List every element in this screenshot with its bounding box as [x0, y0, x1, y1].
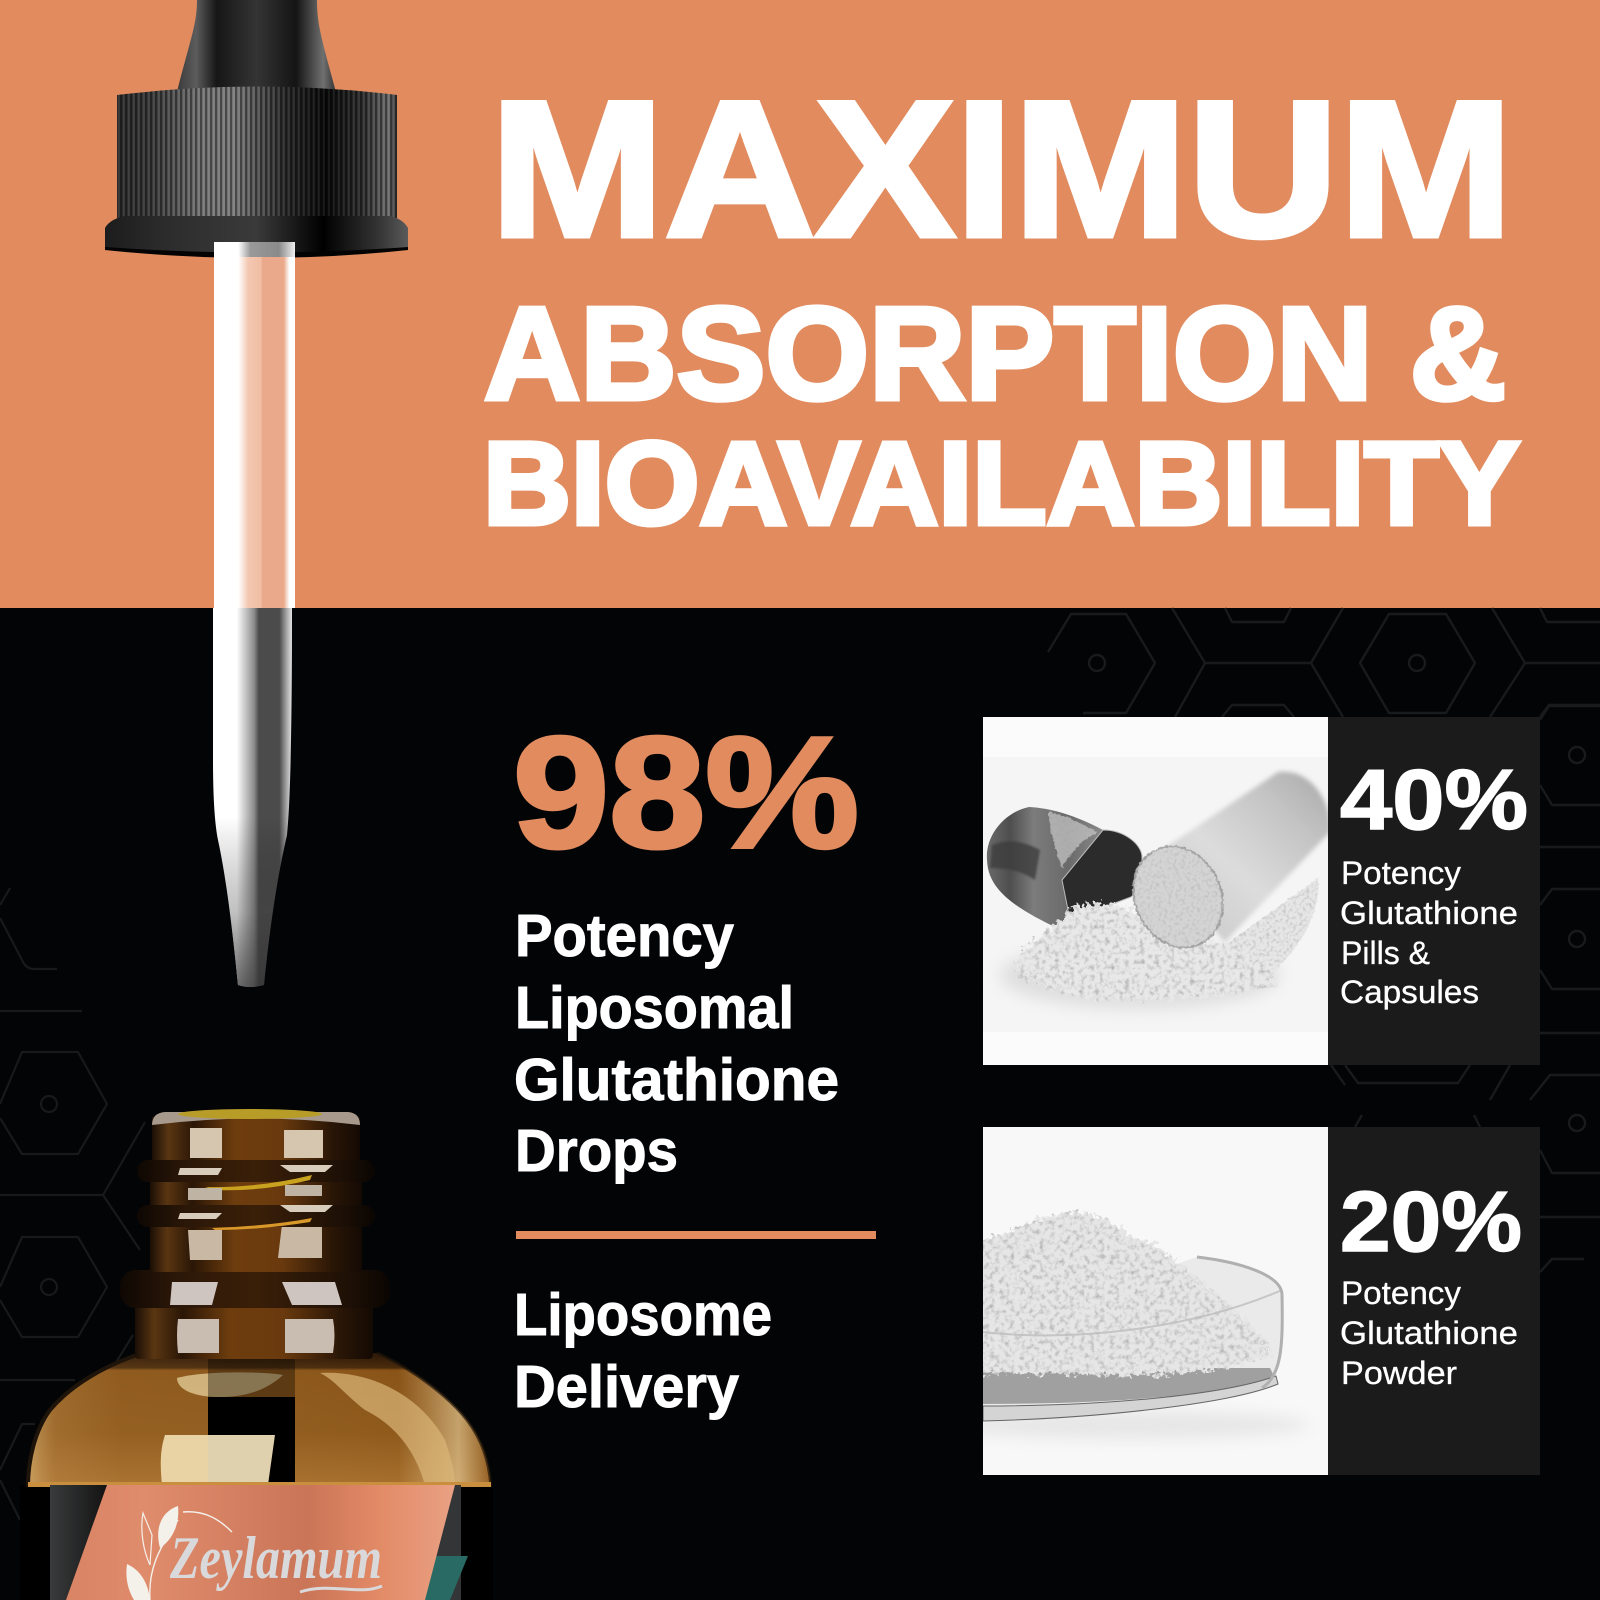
photo: powder in glass dish — [950, 1127, 1328, 1475]
dropper cap flange — [105, 216, 408, 258]
stat description: Potency — [1341, 855, 1461, 891]
stat description: Liposomal — [515, 975, 794, 1041]
delivery text: Liposome — [514, 1282, 772, 1348]
stat number 98%: 98% — [513, 705, 859, 881]
delivery text: Delivery — [514, 1354, 739, 1420]
stat description: Drops — [515, 1118, 678, 1184]
stat description: Glutathione — [514, 1047, 839, 1113]
stat description: Pills & — [1341, 935, 1430, 971]
title — [483, 61, 1520, 550]
stat description: Glutathione — [1340, 1315, 1518, 1351]
panel: pills and capsules comparison — [983, 717, 1540, 1065]
dark stat block — [1328, 1127, 1540, 1475]
stat description — [514, 903, 839, 1184]
photo: open capsules with powder — [983, 717, 1330, 1065]
title line 3: BIOAVAILABILITY — [483, 418, 1520, 550]
stat description: Glutathione — [1340, 895, 1518, 931]
glass pipette, clear section — [214, 242, 295, 608]
stat: 98% liposomal drops — [513, 705, 876, 1420]
title line 2: ABSORPTION & — [484, 280, 1506, 427]
stat description: Powder — [1341, 1355, 1457, 1391]
stat description — [1340, 1275, 1518, 1391]
hexagon pattern: right — [1048, 608, 1600, 1272]
stat description: Capsules — [1340, 974, 1479, 1010]
bottle neck and thread — [120, 1109, 390, 1359]
panel: powder comparison — [950, 1127, 1540, 1475]
divider rule — [516, 1231, 876, 1239]
dropper rubber bulb — [177, 0, 336, 92]
icon: dropper — [105, 0, 408, 987]
dropper ribbed cap — [117, 86, 397, 218]
label name swash — [300, 1586, 382, 1592]
glass pipette, liquid-filled tip — [213, 608, 292, 987]
background: black panel — [0, 608, 1600, 1600]
label brand name: Zeylamum — [169, 1525, 382, 1591]
stat description — [1340, 855, 1518, 1010]
label leaf logo — [126, 1506, 232, 1600]
stat number 40%: 40% — [1340, 753, 1528, 848]
hexagon pattern: left — [0, 888, 145, 1520]
dark stat block — [1328, 717, 1540, 1065]
bottle shoulder — [28, 1353, 491, 1487]
stat description: Potency — [515, 903, 734, 969]
icon: amber glass bottle — [20, 1109, 493, 1600]
product label — [50, 1485, 468, 1600]
delivery text — [514, 1282, 772, 1420]
title line 1: MAXIMUM — [490, 61, 1513, 278]
background: orange header band — [0, 0, 1600, 608]
stat description: Potency — [1341, 1275, 1461, 1311]
stat number 20%: 20% — [1340, 1175, 1522, 1270]
bottle body below the shoulder — [20, 1485, 493, 1600]
